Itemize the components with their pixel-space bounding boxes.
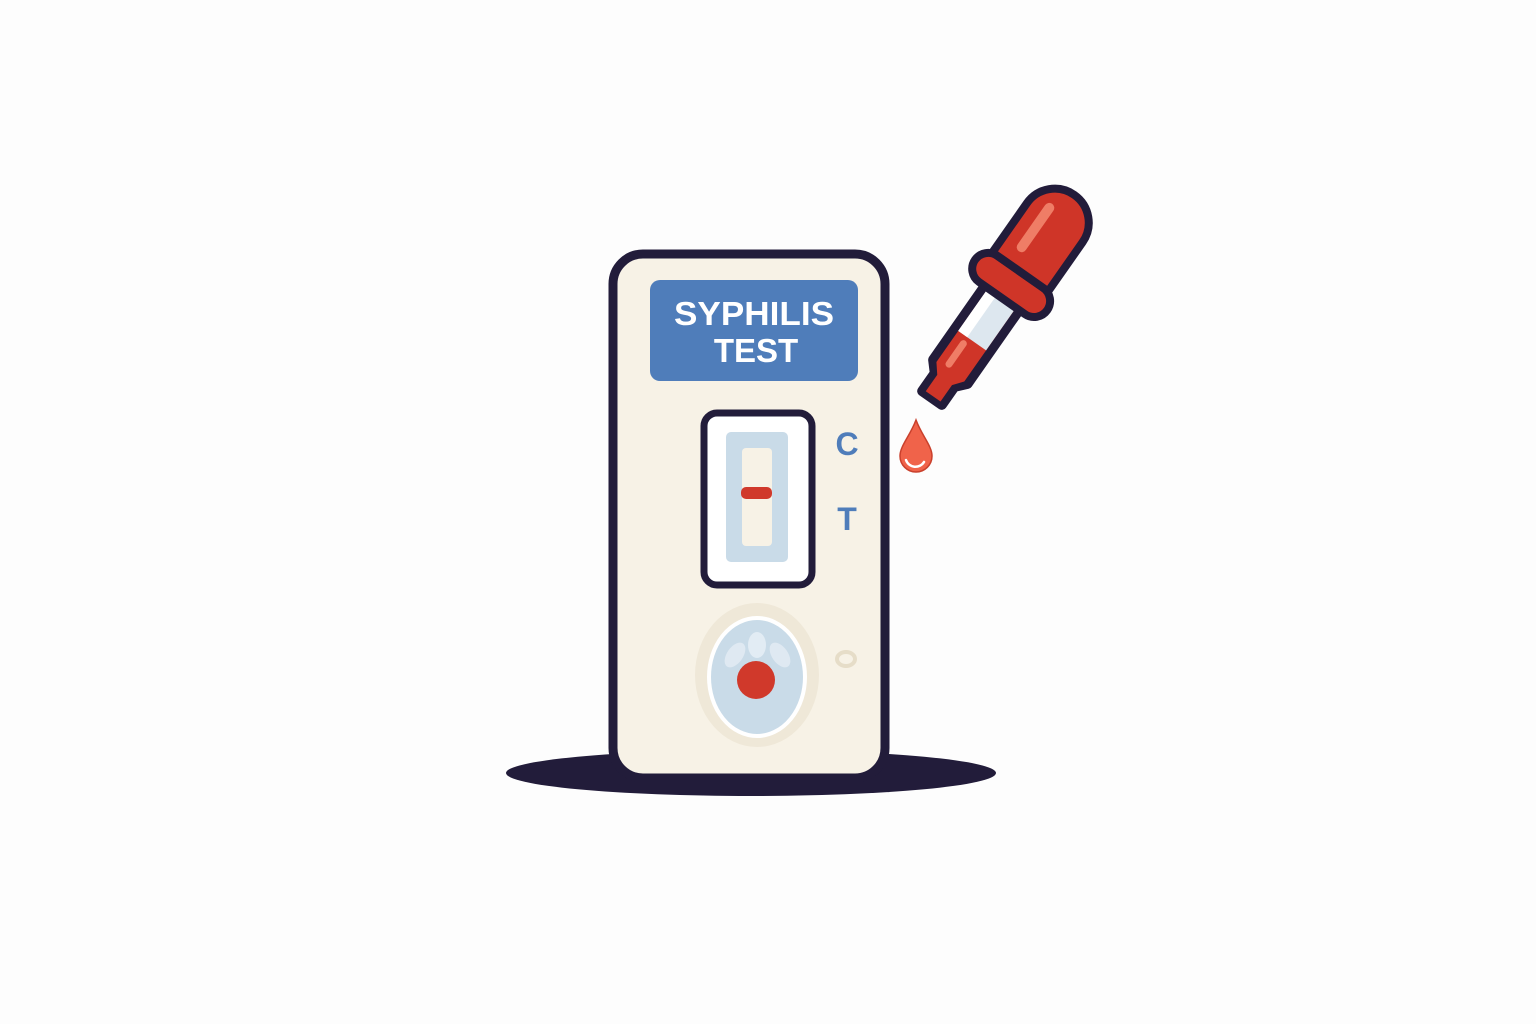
label: syphilis test: TEST	[714, 332, 798, 369]
test cassette	[613, 254, 885, 778]
label C: C	[835, 426, 859, 462]
dropper	[896, 170, 1110, 423]
label T: T	[837, 501, 857, 537]
small indicator circle	[837, 652, 855, 666]
result window	[704, 413, 812, 585]
sample well	[695, 603, 819, 747]
shadow	[506, 750, 996, 796]
label: syphilis test: SYPHILIS	[674, 295, 834, 332]
blood drop	[900, 420, 932, 472]
label: syphilis test	[650, 280, 858, 381]
